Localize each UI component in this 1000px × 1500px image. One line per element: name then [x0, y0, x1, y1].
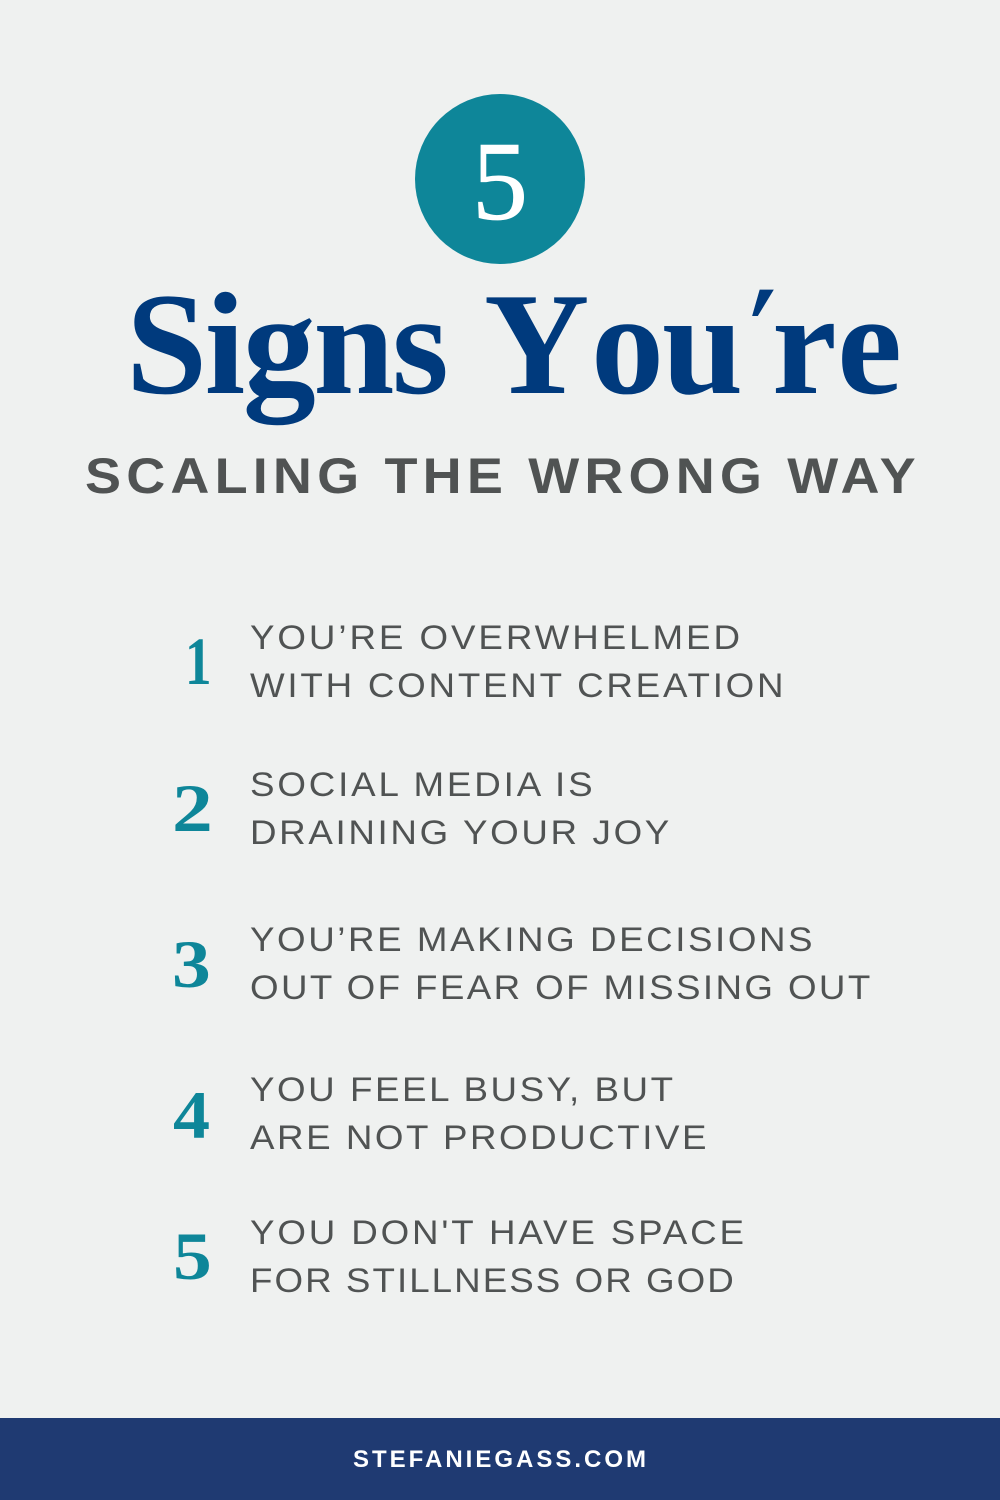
subtitle: SCALING THE WRONG WAY: [85, 448, 921, 504]
badge: teal circle with number 5: 5: [472, 120, 528, 244]
text 1: YOU’RE OVERWHELMED: [250, 619, 743, 657]
text 5: YOU DON'T HAVE SPACE: [250, 1214, 747, 1252]
text 2: DRAINING YOUR JOY: [250, 814, 672, 852]
text 2: SOCIAL MEDIA IS: [250, 766, 595, 804]
title: ou: [591, 263, 741, 425]
title: [126, 263, 905, 426]
text 4: YOU FEEL BUSY, BUT: [250, 1071, 676, 1109]
number 1: 1: [185, 623, 212, 699]
text 5: [250, 1214, 747, 1300]
text 5: FOR STILLNESS OR GOD: [250, 1262, 736, 1300]
number 5: 5: [173, 1218, 212, 1294]
text 3: YOU’RE MAKING DECISIONS: [250, 921, 815, 959]
text 1: WITH CONTENT CREATION: [250, 667, 786, 705]
number 4: 4: [173, 1077, 210, 1153]
footer url: STEFANIEGASS.COM: [353, 1446, 649, 1473]
title: ': [707, 264, 794, 388]
badge: teal circle with number 5: [415, 94, 585, 264]
list item 1: [185, 619, 786, 705]
list item 3: [172, 921, 873, 1007]
text 2: [250, 766, 672, 852]
text 1: [250, 619, 786, 705]
text 3: [250, 921, 873, 1007]
text 4: [250, 1071, 709, 1157]
text 4: ARE NOT PRODUCTIVE: [250, 1119, 709, 1157]
list item 4: [173, 1071, 709, 1157]
list item 2: [172, 766, 672, 852]
list item 5: [173, 1214, 747, 1300]
text 3: OUT OF FEAR OF MISSING OUT: [250, 969, 873, 1007]
title: Y: [484, 263, 589, 425]
title: Signs: [126, 263, 446, 425]
footer bar: [0, 1418, 1000, 1500]
number 3: 3: [172, 926, 211, 1002]
number 2: 2: [172, 770, 213, 846]
title: re: [772, 263, 905, 425]
